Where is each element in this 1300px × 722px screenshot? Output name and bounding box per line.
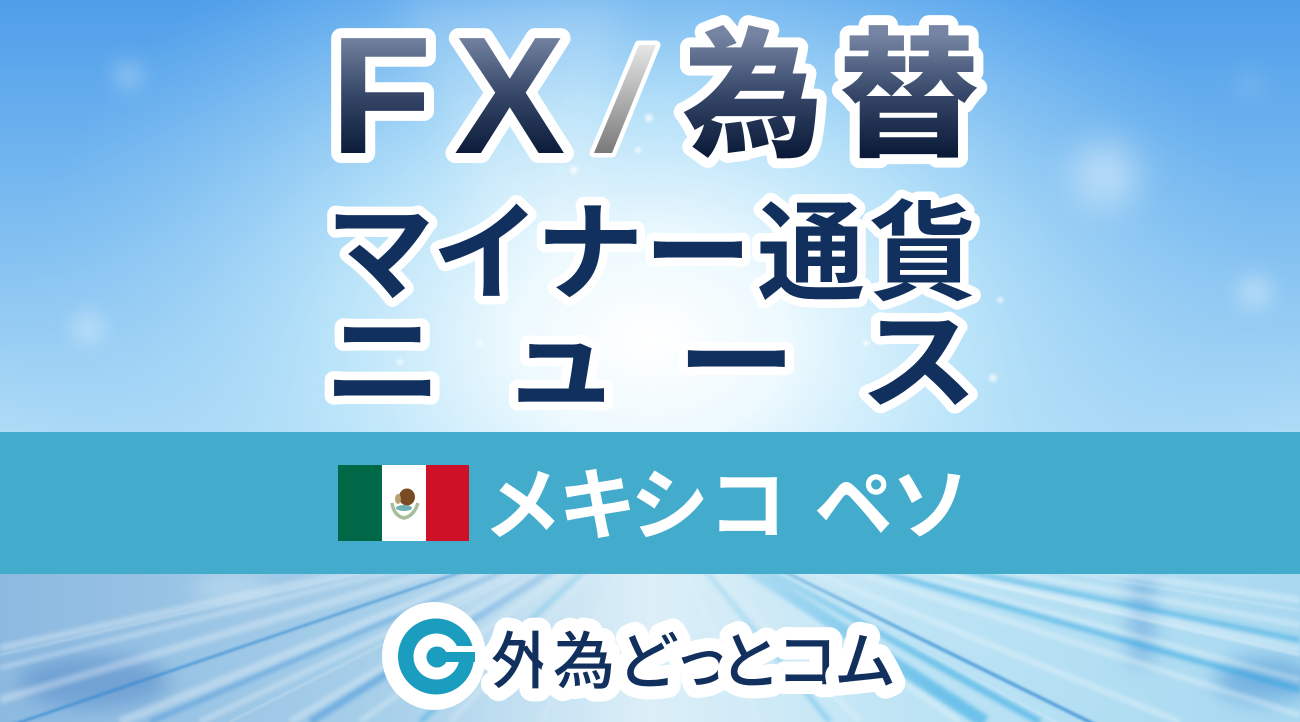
label: Mexican peso: メキシコペソ xyxy=(483,441,970,556)
heading: news line: ニュース xyxy=(324,274,978,431)
background: blue sky glow xyxy=(0,0,1300,432)
title slash xyxy=(594,45,656,153)
heading: minor currency line: マイナー通貨 xyxy=(326,167,977,323)
background: radiating light streaks floor xyxy=(0,574,1300,722)
title: FX/為替 xyxy=(330,0,979,189)
logo wordmark: 外為どっとコム xyxy=(491,611,896,701)
title letters FX: FX xyxy=(330,3,565,189)
band: currency strip xyxy=(0,432,1300,574)
logo: Gaitame.com xyxy=(382,602,896,710)
logo icon xyxy=(382,602,486,710)
flag: Mexico xyxy=(338,465,469,541)
